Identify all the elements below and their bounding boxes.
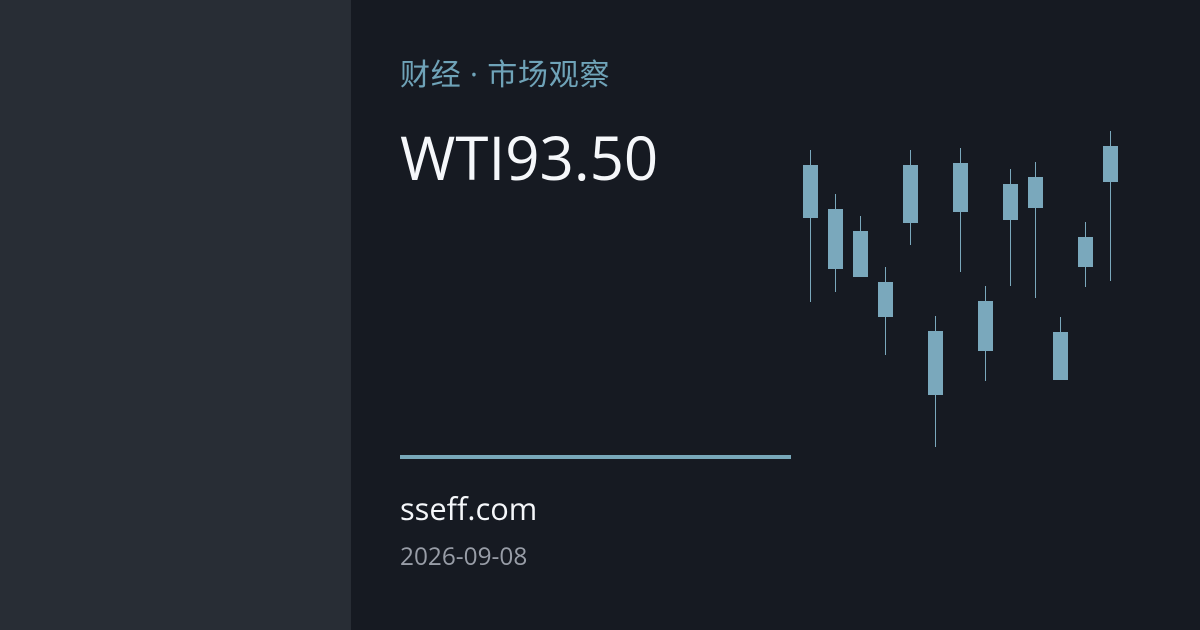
site name: sseff.com <box>400 488 537 530</box>
title: WTI price: WTI93.50 <box>400 116 658 198</box>
accent rule <box>400 455 791 459</box>
left side panel <box>0 0 351 630</box>
date: 2026-09-08 <box>400 540 527 573</box>
eyebrow heading: 财经 · 市场观察 <box>400 53 610 94</box>
